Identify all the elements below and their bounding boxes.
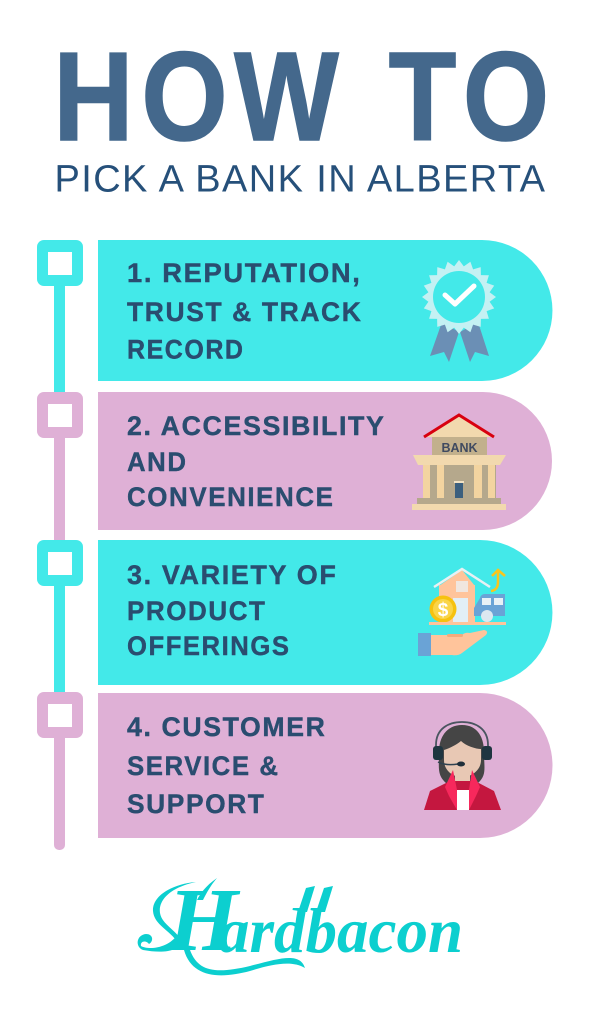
subtitle: PICK A BANK IN ALBERTA: [54, 158, 546, 200]
logo: Hardbacon: ardbacon: [218, 896, 463, 966]
icon: award ribbon: [422, 260, 496, 362]
icon: house, car and coin on a hand: [418, 569, 506, 656]
icon: bank building: [412, 415, 506, 510]
panel: customer service: [98, 693, 552, 838]
step 3 text: 3. VARIETY OF: [127, 560, 338, 590]
step 2 text: CONVENIENCE: [127, 482, 334, 512]
step 2 text: [127, 411, 386, 512]
step 3 text: PRODUCT: [127, 596, 266, 626]
step 1 text: RECORD: [127, 334, 244, 364]
step 1 text: [127, 258, 362, 364]
timeline: [37, 240, 83, 850]
logo: Hardbacon: [138, 871, 463, 975]
step 2 text: 2. ACCESSIBILITY: [127, 411, 386, 441]
panel: reputation: [98, 240, 552, 381]
step 3 text: [127, 560, 338, 661]
step 4 text: [127, 712, 326, 819]
step 3 text: OFFERINGS: [127, 631, 290, 661]
step 1 text: 1. REPUTATION,: [127, 258, 362, 288]
panel: accessibility: [98, 392, 552, 530]
step 1 text: TRUST & TRACK: [127, 297, 362, 327]
icon: support agent with headset: [424, 722, 501, 810]
logo: Hardbacon: H: [167, 871, 241, 970]
title: HOW TO: [53, 27, 549, 168]
step 4 text: SERVICE &: [127, 751, 280, 781]
icon: bank building: BANK: [441, 441, 478, 455]
step 4 text: SUPPORT: [127, 789, 266, 819]
step 4 text: 4. CUSTOMER: [127, 712, 326, 742]
step 2 text: AND: [127, 447, 188, 477]
panel: product offerings: [98, 540, 552, 685]
icon: house, car and coin on a hand: $: [438, 600, 449, 621]
